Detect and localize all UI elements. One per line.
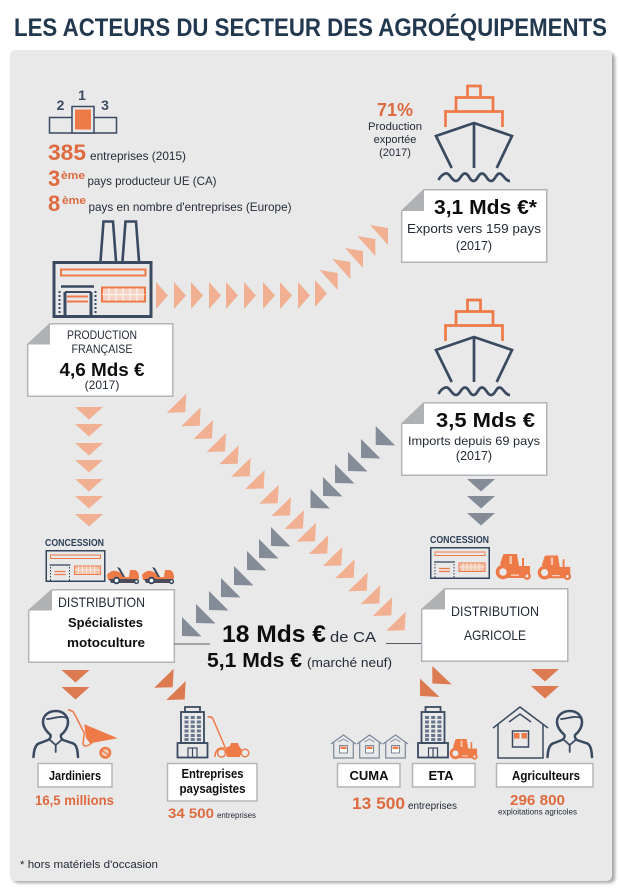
panel: CUMA [338, 764, 400, 787]
arrows: to landscaping companies [154, 669, 186, 700]
text: imports: Imports depuis 69 pays [408, 434, 540, 448]
label: Entreprises [182, 766, 244, 781]
arrows: exports flow [156, 225, 388, 309]
icon: dealership [431, 548, 489, 578]
text: production: PRODUCTION [67, 328, 137, 342]
icon: ETA tractor [451, 739, 477, 759]
figure: CUMA and ETA companies: 13 500 [352, 794, 405, 813]
icon: lawn mower [208, 717, 249, 757]
panel: specialist distribution [28, 589, 174, 662]
figure: companies rank suffix: ème [62, 195, 86, 207]
figure: farms: 296 800 [510, 792, 565, 809]
arrows: to gardeners [62, 670, 90, 700]
figure: 71%: 71% [377, 100, 413, 120]
icon: tractor 2 [539, 556, 570, 579]
footnote: * hors matériels d'occasion [20, 859, 158, 871]
label: CUMA [350, 768, 389, 783]
icon: company building [178, 707, 208, 758]
text: agricole: AGRICOLE [464, 627, 526, 643]
panel: landscaping companies [168, 764, 257, 801]
figure: farms [498, 792, 577, 816]
label: companies: entreprises (2015) [90, 149, 186, 163]
text: spécialistes: Spécialistes [68, 615, 143, 630]
panel: gardeners [38, 764, 112, 787]
text: year: (2017) [85, 378, 119, 392]
icon: podium: 3 [101, 97, 109, 113]
arrows: production to agricultural distribution [167, 394, 406, 631]
figure: producer rank: 3 [48, 166, 60, 191]
figure: companies: 385 [48, 140, 86, 165]
icon: dealership [46, 551, 105, 581]
central market total [174, 621, 421, 672]
label: Jardiniers [49, 769, 101, 783]
value: production: 4,6 Mds € [60, 360, 144, 380]
label: turnover: de CA [330, 629, 376, 646]
icon: podium [50, 87, 116, 133]
arrows: production to specialist distribution [75, 407, 103, 526]
label: CONCESSION [430, 535, 489, 546]
icon: tractor 1 [498, 554, 530, 579]
figure: landscaping companies [168, 805, 256, 821]
label: companies rank: pays en nombre d'entreprises (Europe) [88, 200, 292, 214]
label: producer rank: pays producteur UE (CA) [88, 174, 216, 188]
text: distribution: DISTRIBUTION [58, 594, 145, 610]
icon: wheelbarrow [68, 710, 118, 758]
label: paysagistes [180, 781, 246, 796]
panel: farmers [496, 764, 593, 787]
figure: producer rank suffix: ème [61, 170, 85, 182]
icon: mower 1 [107, 567, 139, 583]
figure: gardeners: 16,5 millions [35, 792, 114, 808]
label: CONCESSION [45, 538, 104, 549]
icon: factory [54, 222, 151, 316]
icon: export ship [436, 86, 512, 181]
icon: CUMA houses [331, 735, 408, 758]
icon: podium: 1 [78, 87, 86, 103]
value: new market: 5,1 Mds € [207, 650, 302, 672]
label: new market: (marché neuf) [307, 655, 392, 670]
concession: specialists [45, 538, 174, 583]
text: exports: Exports vers 159 pays [407, 222, 541, 236]
text: distribution: DISTRIBUTION [451, 603, 539, 619]
icon: ETA building [418, 707, 448, 758]
arrows: imports to agricultural distribution [467, 479, 495, 526]
label: entreprises [217, 810, 256, 820]
label: entreprises [408, 800, 457, 812]
panel: ETA [412, 764, 475, 787]
label: exported: exportée [374, 134, 416, 146]
icon: import ship [436, 300, 512, 395]
icon: farm house [493, 707, 548, 758]
value: imports: 3,5 Mds € [436, 410, 535, 432]
icon: farmer [548, 711, 592, 757]
figure: landscaping companies: 34 500 [168, 805, 214, 821]
arrows: imports to specialist distribution [182, 426, 395, 636]
label: year: (2017) [379, 147, 411, 159]
icon: gardener [34, 711, 78, 757]
figure: CUMA and ETA companies [352, 794, 457, 813]
text: year: (2017) [456, 449, 492, 463]
concession: agricultural [430, 535, 570, 579]
panel: imports [401, 402, 547, 475]
label: ETA [428, 768, 454, 783]
panel: agricultural distribution [421, 588, 568, 661]
figure: companies rank: 8 [48, 191, 60, 216]
text: motoculture: motoculture [67, 635, 145, 650]
value: exports: 3,1 Mds €* [434, 197, 537, 219]
value: total: 18 Mds € [222, 621, 326, 648]
panel: exports [401, 189, 547, 262]
label: Agriculteurs [512, 768, 580, 783]
panel: French production [27, 323, 173, 396]
text: year: (2017) [456, 239, 492, 253]
label: exported production: Production [368, 121, 422, 133]
icon: mower 2 [142, 567, 174, 583]
text: française: FRANÇAISE [72, 342, 132, 356]
text: exported production [368, 100, 422, 159]
label: exploitations agricoles [498, 808, 577, 816]
key figures [48, 140, 292, 216]
icon: podium: 2 [57, 97, 65, 113]
arrows: to CUMA and ETA [420, 666, 452, 697]
arrows: to farmers [531, 669, 559, 698]
